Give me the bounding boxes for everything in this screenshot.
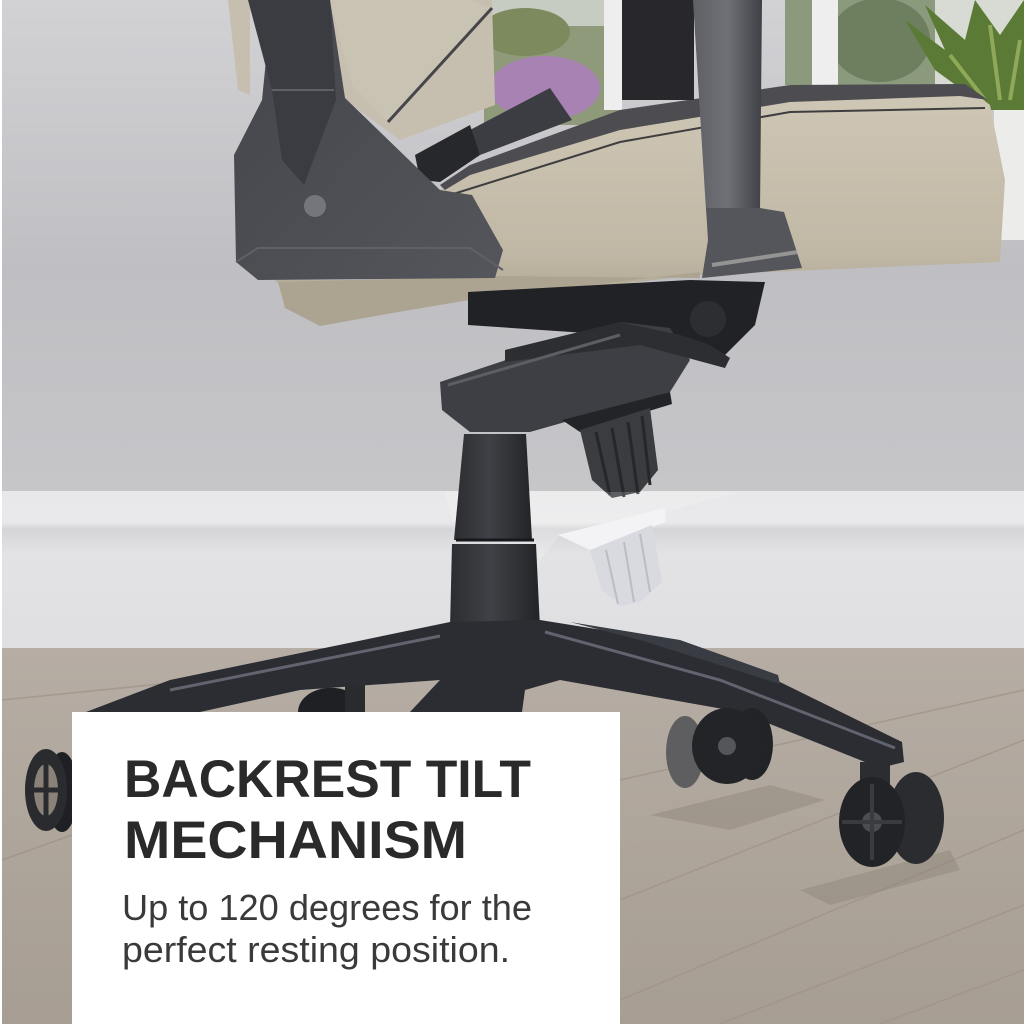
tilt lever handle [415,88,572,182]
caster: front right [839,762,944,867]
caster: back right [666,708,773,788]
tilt knob [562,392,672,498]
tilt mechanism plate [468,280,765,360]
wall [0,0,1024,492]
caption panel [72,712,620,1024]
side bracket [234,0,503,280]
gas lift piston [450,434,540,628]
caster: left [25,749,78,832]
ghosted knob showing tilt travel [445,492,740,606]
heading: BACKREST TILT [124,750,531,809]
mechanism housing [440,322,730,432]
heading: MECHANISM [124,811,467,870]
caster: rear centre [298,685,365,712]
wooden floor [2,648,1024,1024]
description: Up to 120 degrees for the [122,887,532,928]
armrest post [622,0,802,278]
skirting board [2,491,1024,649]
backrest fabric [228,0,495,140]
description: perfect resting position. [122,929,510,970]
star base [86,620,904,768]
description [122,887,532,970]
heading [124,750,531,870]
window with garden view [480,0,1024,125]
potted plant [905,0,1024,240]
seat cushion [275,84,1005,326]
